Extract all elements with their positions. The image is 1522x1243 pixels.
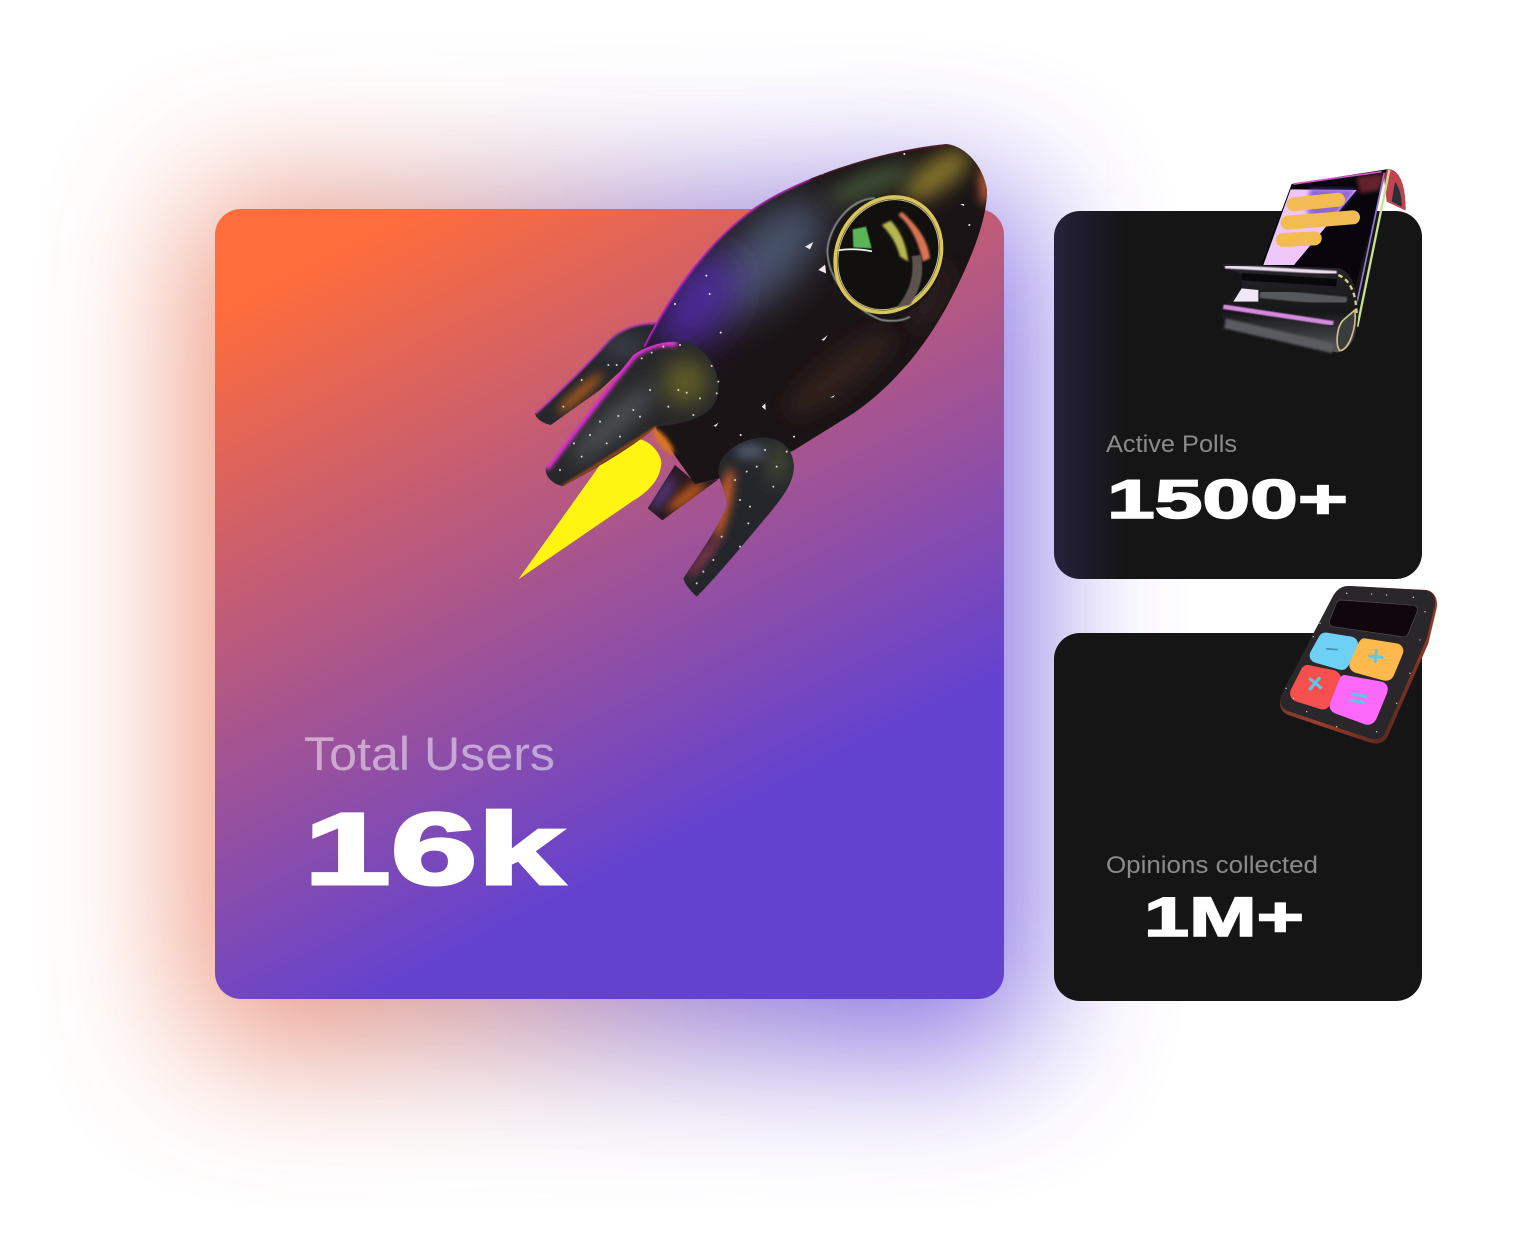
value: 1500+: 1500+ <box>1107 468 1348 530</box>
value: 16k: 16k <box>304 792 564 906</box>
rocket window <box>804 175 964 341</box>
scroll edge <box>1357 170 1389 327</box>
label: opinions collected: Opinions collected <box>1106 852 1318 879</box>
label: total users: Total Users <box>304 728 555 781</box>
button: multiply <box>1290 665 1341 710</box>
infographic canvas <box>84 88 1438 1156</box>
icon: rocket <box>518 137 997 600</box>
calculator body <box>1280 586 1437 744</box>
scroll sheet <box>1260 169 1387 293</box>
icon: calculator <box>1280 586 1437 744</box>
rocket front fin <box>546 342 718 486</box>
value: 1M+: 1M+ <box>1144 885 1304 948</box>
panel: active polls <box>1054 211 1422 579</box>
button: equals <box>1330 675 1388 725</box>
rocket exhaust glow <box>650 426 677 457</box>
button: minus <box>1310 633 1358 670</box>
rocket flame <box>518 439 661 579</box>
label: active polls: Active Polls <box>1106 431 1237 458</box>
icon: scroll with poll bars <box>1221 169 1406 352</box>
button: plus <box>1349 638 1403 681</box>
panel: total users <box>215 209 1004 999</box>
rocket fin specks <box>560 345 787 583</box>
background glow <box>190 195 1030 1050</box>
calculator specks <box>1286 593 1425 732</box>
panel: opinions collected <box>1054 633 1422 1001</box>
rocket rear fin <box>648 465 718 520</box>
scroll sheet sheen <box>1263 189 1357 265</box>
rocket lower fin <box>684 438 794 596</box>
rocket body specks <box>713 204 964 427</box>
calculator screen <box>1329 600 1417 637</box>
scroll bottom roll <box>1221 264 1358 352</box>
rocket back fin <box>534 322 656 425</box>
rocket body <box>633 137 997 490</box>
scroll top roll <box>1383 169 1406 211</box>
scroll bars <box>1283 200 1353 240</box>
